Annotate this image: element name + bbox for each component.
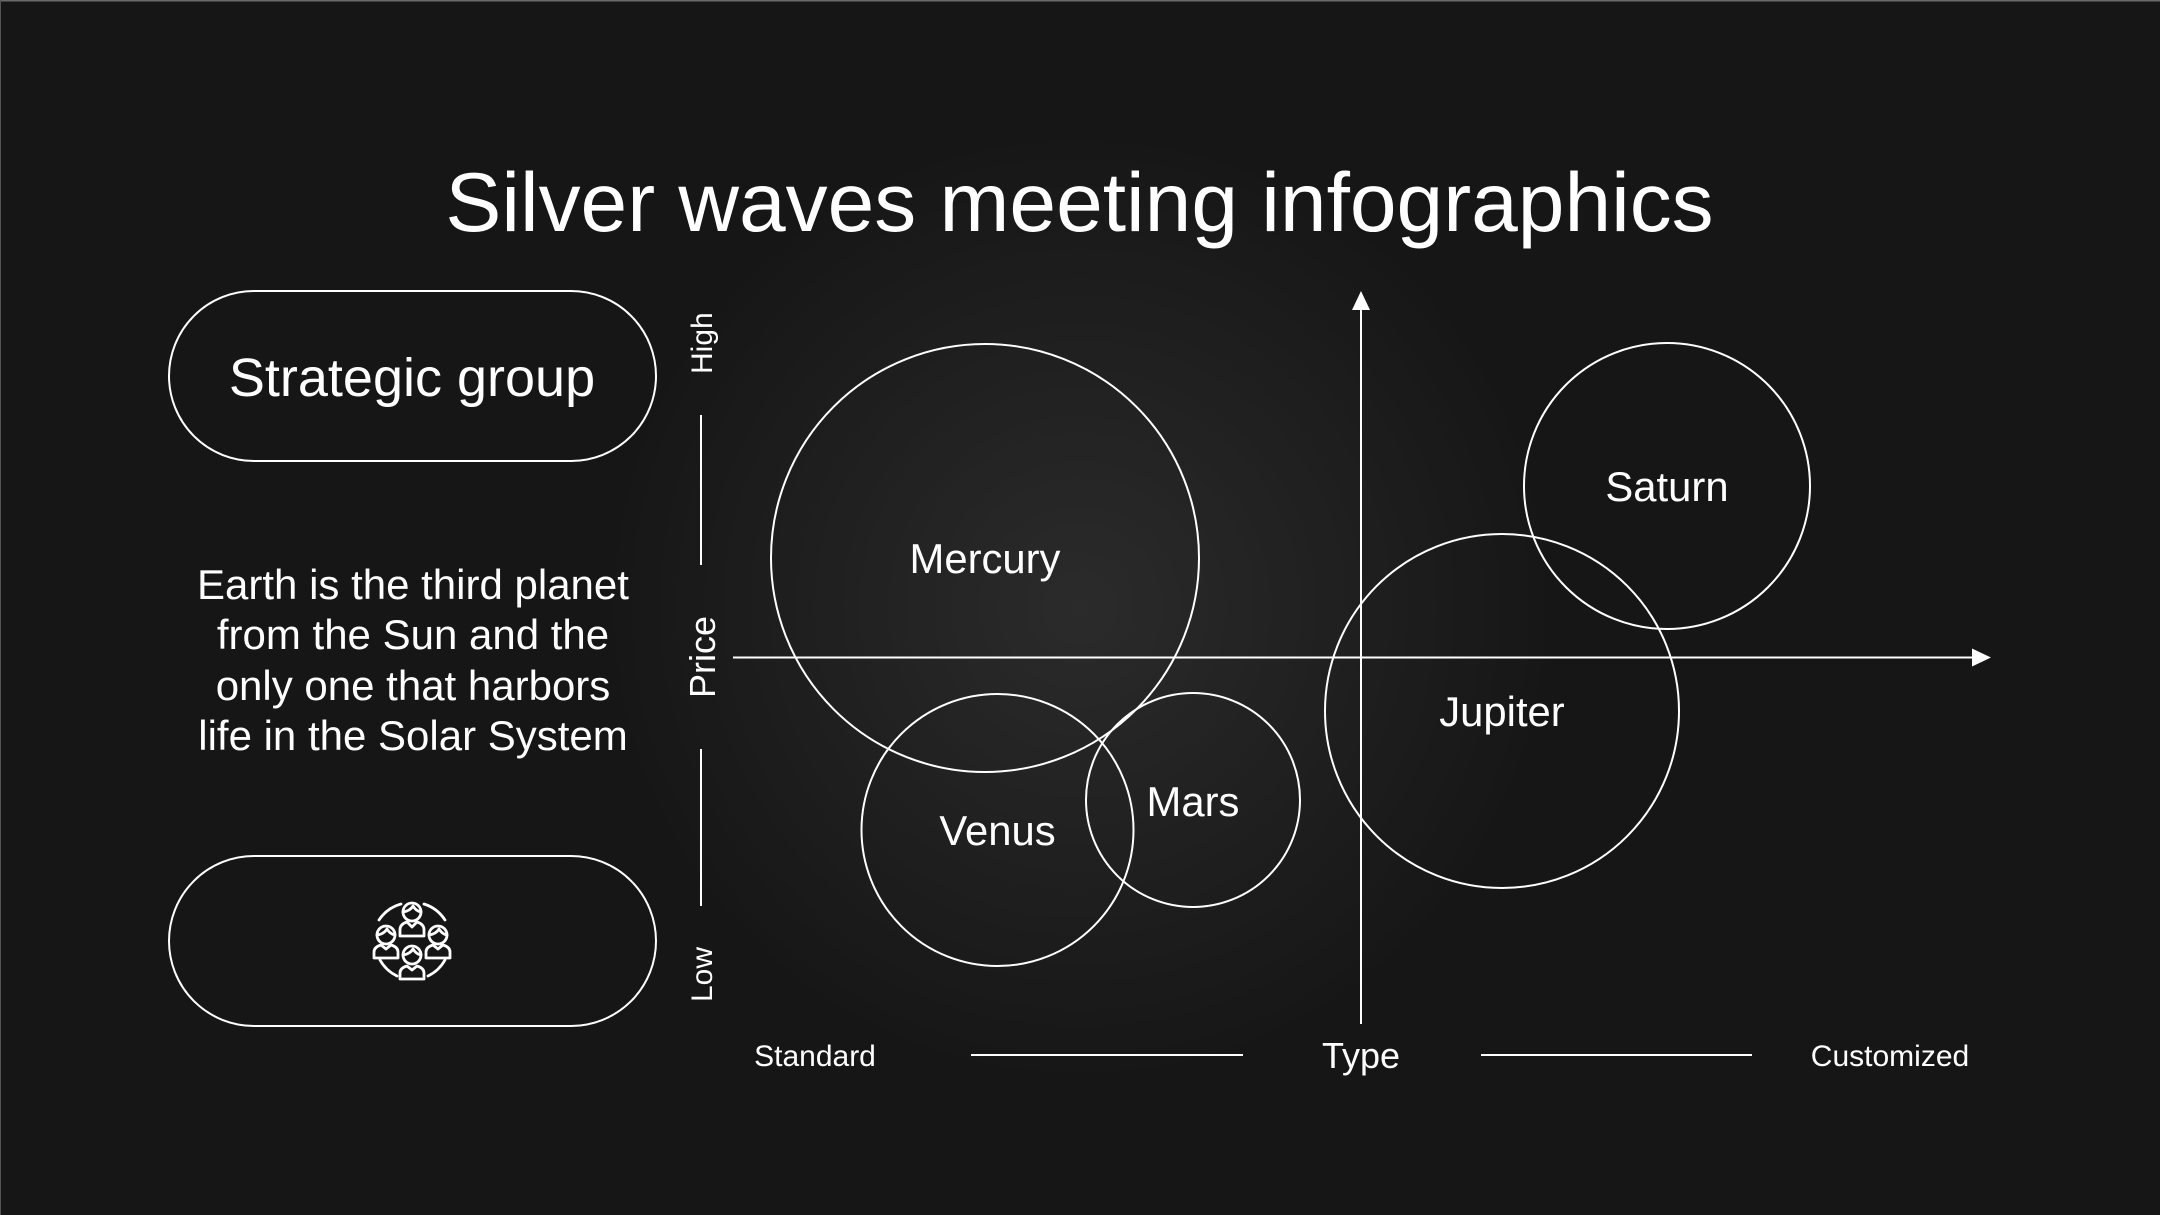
text block: description: only one that harbors <box>216 662 610 709</box>
text block: description: from the Sun and the <box>217 611 609 658</box>
x axis lines <box>971 1054 1752 1056</box>
bubble: Jupiter <box>1325 534 1679 888</box>
bubble: Mars: Mars <box>1147 778 1239 825</box>
text block: description <box>197 561 629 759</box>
bubble: Mercury: Mercury <box>910 535 1061 582</box>
y axis label: High: High <box>686 312 719 374</box>
bubble: Mars <box>1086 693 1300 907</box>
arrow: horizontal axis <box>733 648 1991 666</box>
bubble: Saturn: Saturn <box>1605 463 1729 510</box>
arrow: vertical axis <box>1352 291 1370 1024</box>
bubble: Jupiter: Jupiter <box>1439 688 1565 735</box>
x axis label: Customized: Customized <box>1811 1040 1969 1073</box>
panel: strategic group pill <box>169 291 656 461</box>
title: Silver waves meeting infographics <box>445 155 1714 249</box>
bubble: Saturn <box>1524 343 1810 629</box>
text block: description: life in the Solar System <box>198 712 628 759</box>
y axis label: Low: Low <box>686 947 719 1002</box>
icon: group of people in a circle <box>374 903 450 979</box>
y axis lines <box>700 415 702 906</box>
bubble: Mercury <box>771 344 1199 772</box>
panel: strategic group pill: Strategic group <box>229 348 595 408</box>
x axis label: Type: Type <box>1322 1035 1400 1076</box>
x axis label: Standard: Standard <box>754 1040 876 1073</box>
panel: icon pill <box>169 856 656 1026</box>
text block: description: Earth is the third planet <box>197 561 629 608</box>
bubble: Venus <box>862 694 1134 966</box>
y axis label: Price: Price <box>682 616 723 698</box>
bubble: Venus: Venus <box>939 807 1056 854</box>
